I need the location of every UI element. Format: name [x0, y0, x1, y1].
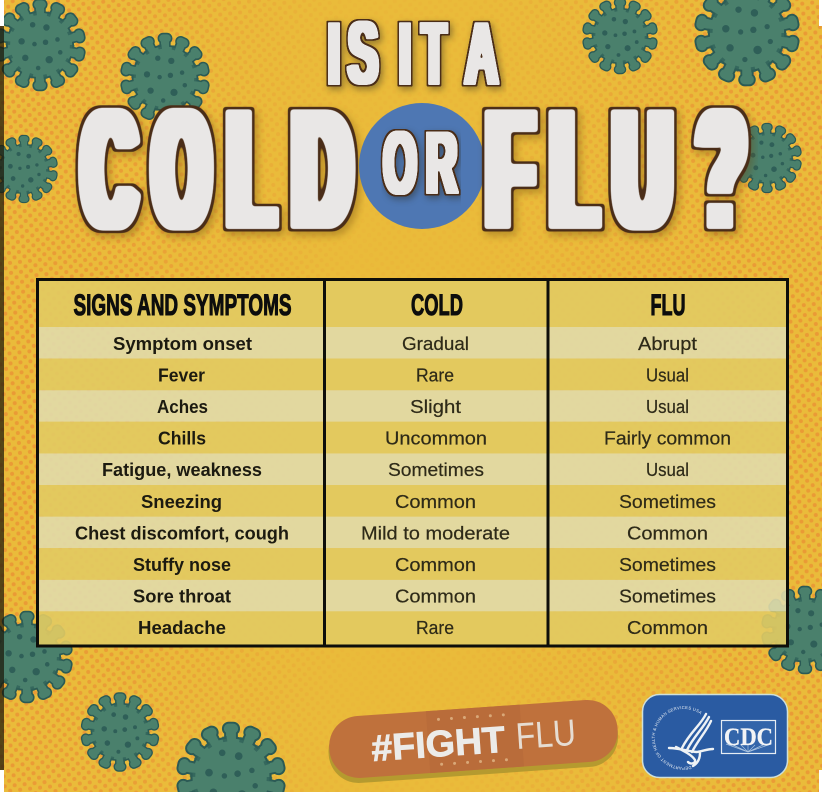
row: Sore throat: Sore throat — [133, 586, 231, 606]
row: Symptom onset: Symptom onset — [113, 334, 252, 354]
row: Fever: Rare — [416, 366, 454, 386]
table header row: SIGNS AND SYMPTOMS — [74, 289, 292, 322]
OR badge — [359, 103, 485, 229]
row: Chest discomfort, cough: Mild to moderate — [361, 523, 510, 543]
row: Fatigue, weakness: Sometimes — [388, 460, 484, 480]
row: Fever: Fever — [158, 366, 205, 386]
row: Chills: Fairly common — [604, 429, 731, 449]
title: IS IT A: T — [422, 4, 446, 103]
icon: virus bottom-right — [767, 591, 822, 669]
title: FLU? — [488, 75, 745, 263]
row: Sneezing: Sometimes — [619, 492, 716, 512]
row: Sore throat — [133, 586, 716, 606]
icon: virus bottom-center — [183, 729, 279, 792]
table header row: COLD — [411, 289, 463, 322]
row: Sneezing: Common — [395, 492, 476, 512]
title: IS IT A: S — [348, 3, 378, 102]
row: Headache: Headache — [138, 618, 226, 638]
row: Stuffy nose: Sometimes — [619, 555, 716, 575]
OR badge: O — [384, 113, 416, 212]
row: Aches: Aches — [157, 397, 208, 417]
row: Sore throat: Sometimes — [619, 586, 716, 606]
row: Chest discomfort, cough: Chest discomfort, cough — [75, 523, 289, 543]
HHS ring text: DEPARTMENT OF HEALTH & HUMAN SERVICES USA — [652, 706, 702, 770]
CDC box: CDC — [724, 724, 773, 751]
row: Stuffy nose — [133, 555, 716, 575]
logo: HHS and CDC — [642, 694, 788, 778]
title: COLD: C — [83, 75, 135, 263]
row: Fever — [158, 366, 689, 386]
row: Fatigue, weakness — [102, 460, 689, 480]
row: Chills: Chills — [158, 429, 206, 449]
row: Chills: Uncommon — [385, 429, 487, 449]
row: Fever: Usual — [646, 366, 689, 386]
title: IS IT A: I — [328, 4, 340, 103]
badge: #FIGHT FLU bandage — [326, 698, 620, 785]
text: ? — [698, 75, 745, 263]
row: Symptom onset: Abrupt — [638, 334, 697, 354]
icon: virus top center-right — [587, 3, 653, 69]
row: Symptom onset — [113, 334, 697, 354]
row: Headache: Common — [627, 618, 708, 638]
row: Aches: Usual — [646, 397, 689, 417]
row: Chest discomfort, cough — [75, 523, 708, 543]
row: Aches — [157, 397, 689, 417]
icon: virus top-left — [0, 5, 80, 85]
title: FLU?: L — [552, 75, 596, 263]
icon: virus right of question mark — [737, 127, 797, 189]
row: Headache — [138, 618, 708, 638]
icon: HHS eagle — [669, 714, 713, 766]
title: COLD — [83, 75, 351, 263]
title: IS IT A: A — [465, 4, 498, 103]
icon: virus bottom — [86, 697, 154, 767]
row: Aches: Slight — [410, 397, 461, 417]
row: Sneezing: Sneezing — [141, 492, 222, 512]
badge: #FIGHT FLU bandage: #FIGHT — [370, 719, 507, 769]
table header row — [74, 289, 686, 322]
row: Stuffy nose: Stuffy nose — [133, 555, 231, 575]
badge: #FIGHT FLU bandage: FLU — [514, 712, 577, 757]
row: Symptom onset: Gradual — [402, 334, 469, 354]
row: Fatigue, weakness: Usual — [646, 460, 689, 480]
title: IS IT A — [328, 3, 498, 103]
title: IS IT A: I — [399, 4, 411, 103]
row: Sneezing — [141, 492, 716, 512]
row: Stuffy nose: Common — [395, 555, 476, 575]
icon: virus bottom-left — [0, 617, 67, 697]
row: Chills — [158, 429, 731, 449]
row: Fatigue, weakness: Fatigue, weakness — [102, 460, 262, 480]
row: Chest discomfort, cough: Common — [627, 523, 708, 543]
icon: virus top-right — [701, 0, 793, 80]
table header row: FLU — [650, 289, 686, 322]
title: FLU?: U — [614, 75, 671, 263]
title: COLD: O — [154, 75, 209, 263]
table bands — [37, 279, 787, 646]
title: FLU?: F — [488, 75, 532, 263]
icon: virus left — [0, 139, 53, 199]
table — [37, 279, 788, 646]
row: Headache: Rare — [416, 618, 454, 638]
title: COLD: L — [228, 75, 274, 263]
OR badge: R — [426, 113, 457, 212]
row: Sore throat: Common — [395, 586, 476, 606]
icon: virus upper-middle — [126, 38, 204, 118]
text: D — [293, 75, 351, 263]
